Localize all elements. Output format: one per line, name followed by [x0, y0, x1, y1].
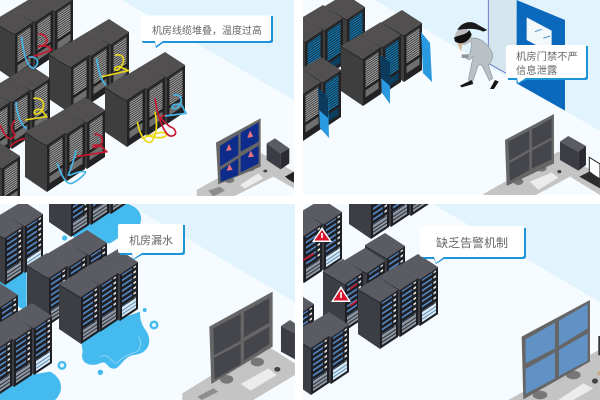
callout: door access: 机房门禁不严 — [516, 50, 578, 63]
server racks with open doors — [303, 0, 432, 141]
panel: cable clutter — [0, 0, 294, 215]
workstation desk — [182, 292, 295, 400]
callout: water leak — [118, 224, 185, 260]
callout: door access — [506, 45, 588, 84]
server racks — [0, 204, 138, 394]
icon: dark monitor wall — [209, 292, 273, 384]
computer tower — [267, 138, 289, 169]
callout: door access: 信息泄露 — [516, 64, 557, 77]
icon: monitor wall with alerts — [216, 118, 261, 184]
callout: no alarm: 缺乏告警机制 — [436, 235, 508, 250]
computer tower — [560, 136, 586, 171]
icon: warning triangle lower — [331, 286, 351, 302]
floor and wall — [303, 0, 600, 195]
icon: open door — [488, 0, 565, 111]
panel: door access — [281, 0, 600, 200]
floor and wall — [0, 0, 294, 196]
server racks — [0, 0, 185, 215]
callout: water leak: 机房漏水 — [129, 233, 173, 247]
floor and wall — [303, 204, 600, 400]
computer tower — [281, 320, 295, 359]
laptop — [579, 157, 600, 188]
panel: water leak — [0, 204, 295, 400]
icon: blue monitor wall — [522, 300, 590, 399]
server racks — [303, 204, 438, 395]
floor and wall — [0, 204, 295, 400]
icon: warning triangle upper — [312, 227, 332, 242]
icon: dark monitor wall — [505, 114, 554, 186]
callout: cable clutter: 机房线缆堆叠，温度过高 — [152, 24, 262, 37]
callout: no alarm — [420, 226, 526, 264]
tangled cables — [0, 34, 186, 184]
panel: no alarm — [303, 204, 600, 400]
workstation desk — [483, 114, 600, 200]
workstation desk — [197, 118, 294, 200]
callout: cable clutter — [141, 16, 273, 48]
workstation desk — [508, 300, 600, 400]
red status lights — [303, 253, 357, 307]
water pools — [0, 204, 157, 400]
icon: thief — [454, 22, 499, 89]
